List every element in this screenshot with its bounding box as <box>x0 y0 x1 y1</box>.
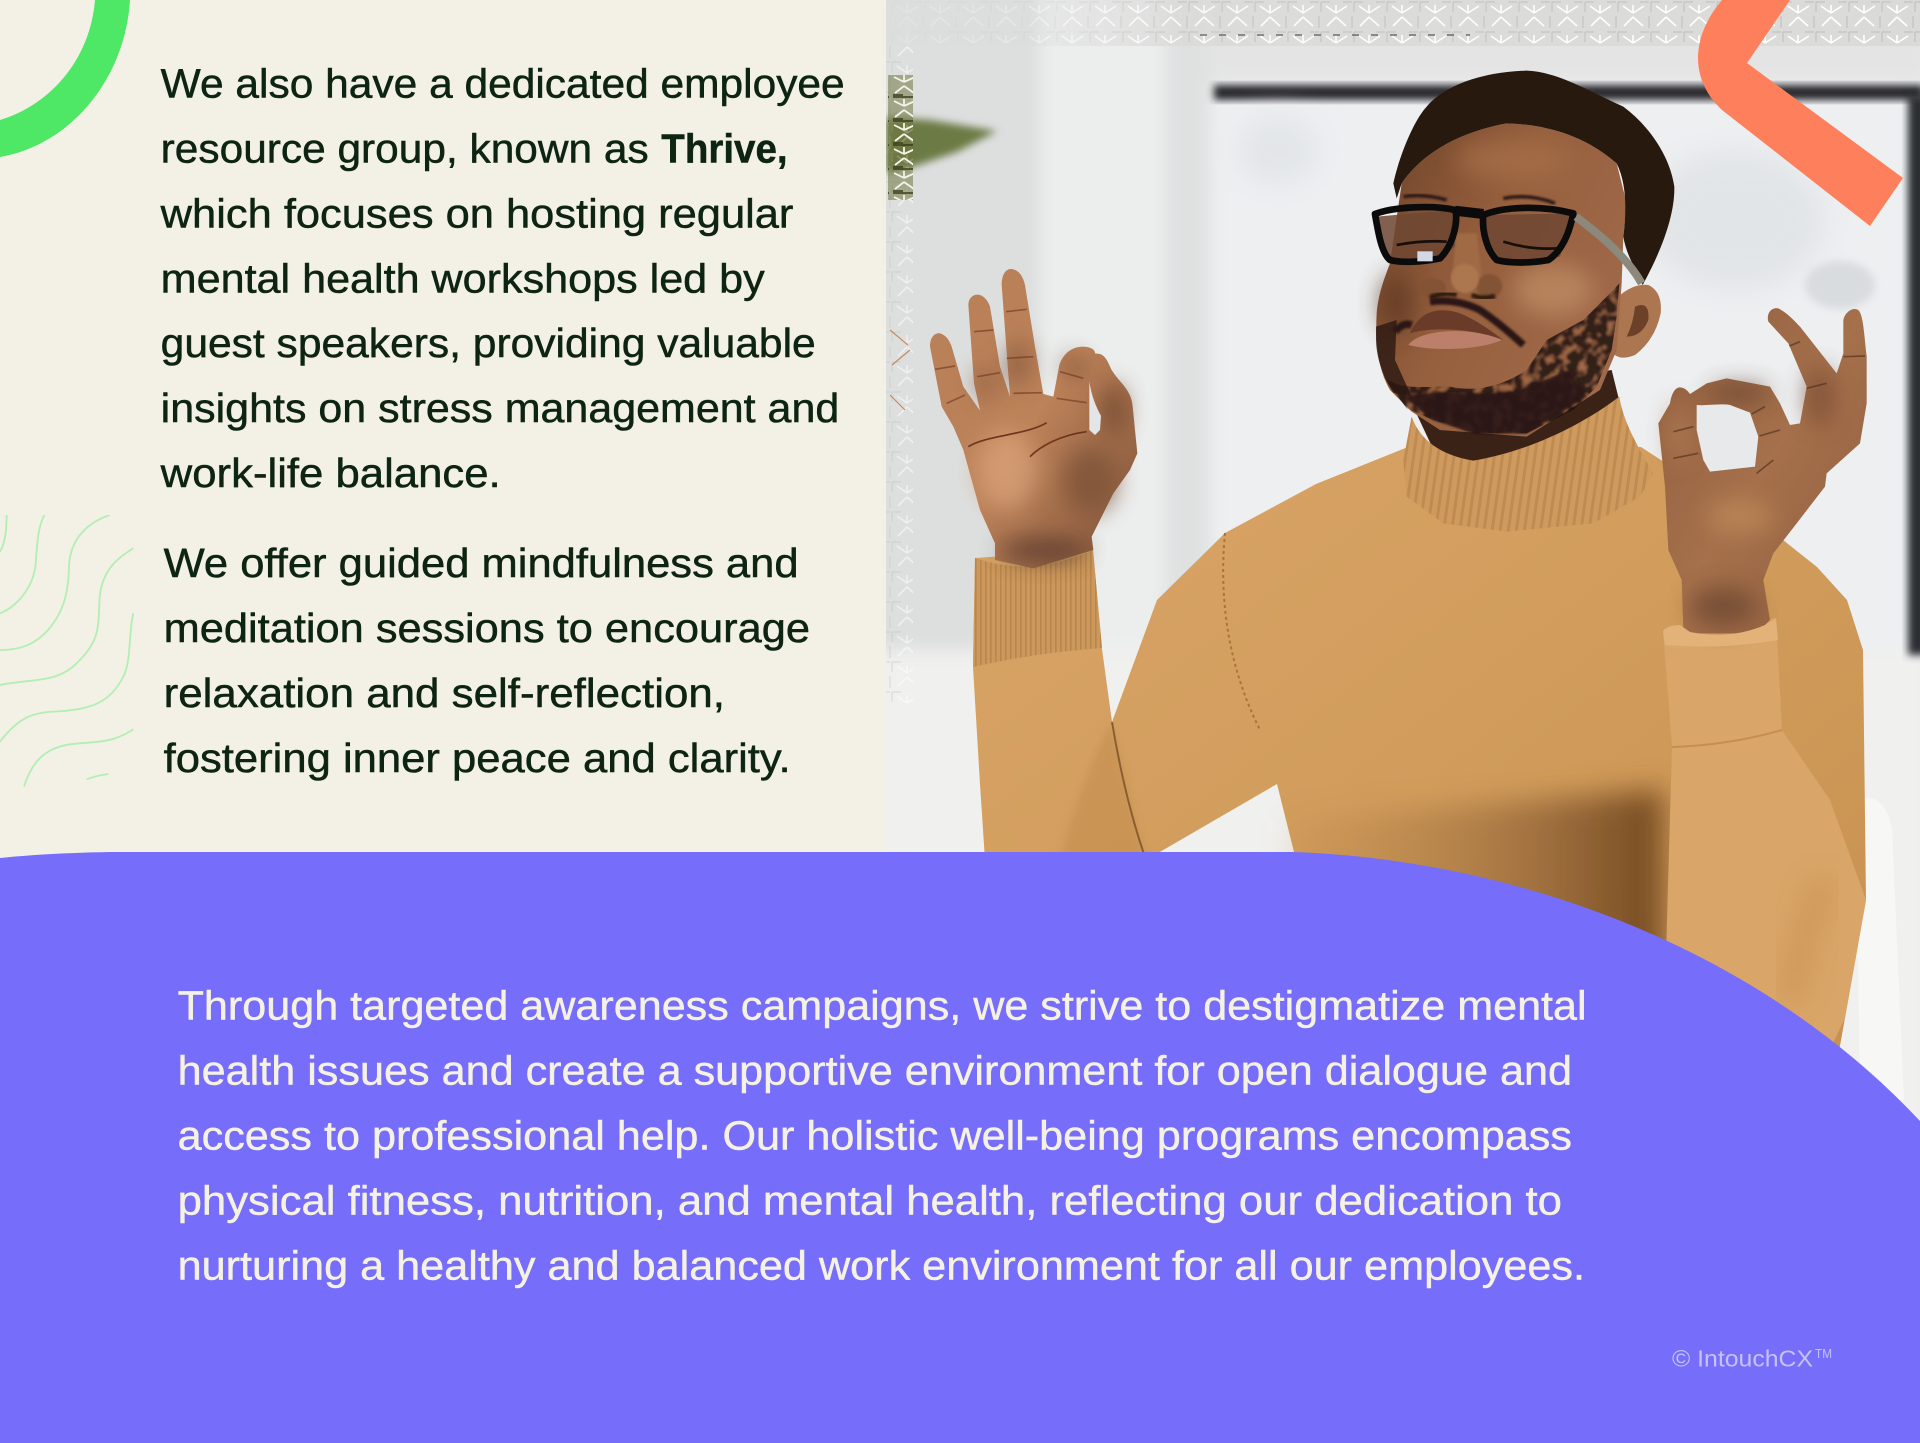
glasses <box>1375 196 1642 283</box>
finger joint lines <box>1673 342 1865 473</box>
text block: awareness campaigns: Through targeted awareness campaigns, we strive to destigmatize mental <box>178 983 1587 1029</box>
text block: awareness campaigns: physical fitness, nutrition, and mental health, reflecting our dedication to <box>178 1178 1562 1224</box>
text block: awareness campaigns: health issues and create a supportive environment for open dialogue and <box>178 1048 1572 1094</box>
text block: Thrive employee resource group: work-life balance. <box>160 450 501 496</box>
hair <box>1393 71 1674 285</box>
sweater torso and arms <box>973 447 1866 1047</box>
copyright note: © IntouchCX <box>1672 1346 1813 1372</box>
sweater shadow folds <box>1060 533 1825 1000</box>
coral chevron accent <box>1698 0 1903 226</box>
text block: Thrive employee resource group: We also have a dedicated employee <box>161 61 845 107</box>
text block: Thrive employee resource group: Thrive, <box>661 125 788 171</box>
photo: meditating man in ochre turtleneck <box>870 0 1920 1150</box>
text block: Thrive employee resource group: guest speakers, providing valuable <box>161 320 816 366</box>
neck <box>1412 370 1619 467</box>
green arc accent <box>0 0 130 157</box>
text block: Thrive employee resource group: resource group, known as <box>161 125 649 171</box>
text block: Thrive employee resource group: insights on stress management and <box>161 385 839 431</box>
purple curved footer panel <box>0 852 1920 1443</box>
left hand <box>930 269 1137 568</box>
text block: awareness campaigns <box>178 983 1587 1288</box>
face <box>1376 123 1627 437</box>
thumb-finger gap <box>1697 404 1758 472</box>
photo background: blurred office <box>870 0 1920 1150</box>
palm shading <box>976 340 1125 561</box>
head and neck <box>1375 71 1674 532</box>
decorative pattern strip along the left edge <box>886 46 913 706</box>
nose <box>1419 233 1502 298</box>
beard left jaw <box>1376 320 1412 397</box>
copyright note: TM <box>1815 1346 1832 1361</box>
text block: awareness campaigns: access to professional help. Our holistic well-being programs encompass <box>178 1112 1572 1158</box>
text block: awareness campaigns: nurturing a healthy and balanced work environment for all our employees. <box>178 1242 1585 1288</box>
text block: Thrive employee resource group <box>160 61 845 496</box>
moustache <box>1395 301 1523 345</box>
ear <box>1612 285 1661 358</box>
palm creases <box>935 309 1087 457</box>
right cuff fold <box>1672 730 1782 747</box>
facial highlights <box>1380 140 1593 333</box>
decorative pattern band along the top <box>886 0 1920 46</box>
hand shading <box>1670 367 1833 627</box>
lips <box>1408 310 1503 349</box>
left cuff ribbing <box>973 550 1102 667</box>
text block: guided mindfulness <box>164 540 810 781</box>
text block: guided mindfulness: We offer guided mindfulness and <box>164 540 799 586</box>
text block: Thrive employee resource group: which focuses on hosting regular <box>160 190 793 236</box>
right sleeve <box>1663 618 1866 1060</box>
text block: guided mindfulness: fostering inner peace and clarity. <box>164 735 791 781</box>
thumb-finger gap <box>1089 382 1101 435</box>
right hand <box>1658 308 1867 633</box>
torso lower shading <box>1284 774 1670 940</box>
beard chin <box>1403 370 1587 433</box>
turtleneck collar <box>1403 397 1653 532</box>
decorative wavy lines <box>0 515 133 787</box>
beard cheek stubble <box>1383 283 1619 433</box>
text block: guided mindfulness: relaxation and self-reflection, <box>164 670 725 716</box>
right cuff rim <box>1663 618 1778 647</box>
text block: guided mindfulness: meditation sessions to encourage <box>164 605 810 651</box>
text block: Thrive employee resource group: mental health workshops led by <box>161 255 765 301</box>
